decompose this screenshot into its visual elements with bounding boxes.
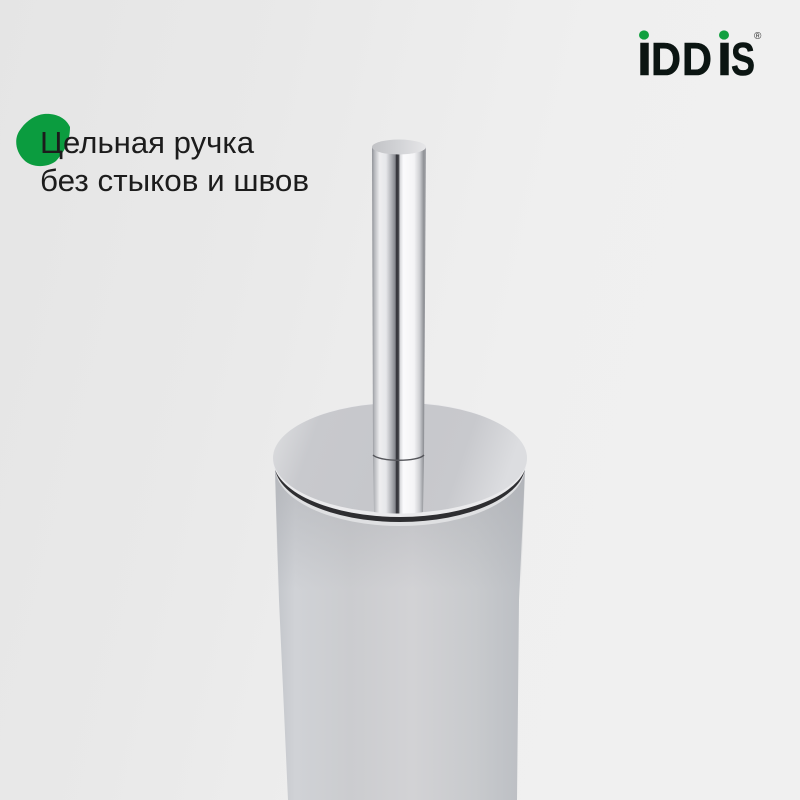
logo: IDDIS bbox=[637, 30, 762, 85]
green accent blob bbox=[16, 114, 70, 166]
heading line 1: Цельная ручка bbox=[40, 125, 255, 160]
container body bbox=[275, 470, 525, 800]
lid top bbox=[273, 403, 527, 513]
handle bbox=[372, 140, 426, 514]
logo wordmark: I bbox=[717, 33, 732, 85]
lid rim bbox=[273, 402, 527, 526]
heading text bbox=[40, 125, 309, 198]
handle collar seam bbox=[373, 455, 424, 460]
logo wordmark: S bbox=[731, 33, 755, 85]
registered mark: ® bbox=[754, 31, 762, 42]
handle cap bbox=[372, 140, 426, 154]
logo wordmark: I bbox=[637, 33, 652, 85]
logo dots bbox=[639, 30, 729, 40]
logo wordmark bbox=[637, 33, 755, 85]
logo wordmark: D bbox=[651, 33, 681, 85]
heading line 2: без стыков и швов bbox=[40, 163, 309, 198]
product: toilet brush holder bbox=[273, 140, 527, 800]
logo wordmark: D bbox=[682, 33, 712, 85]
